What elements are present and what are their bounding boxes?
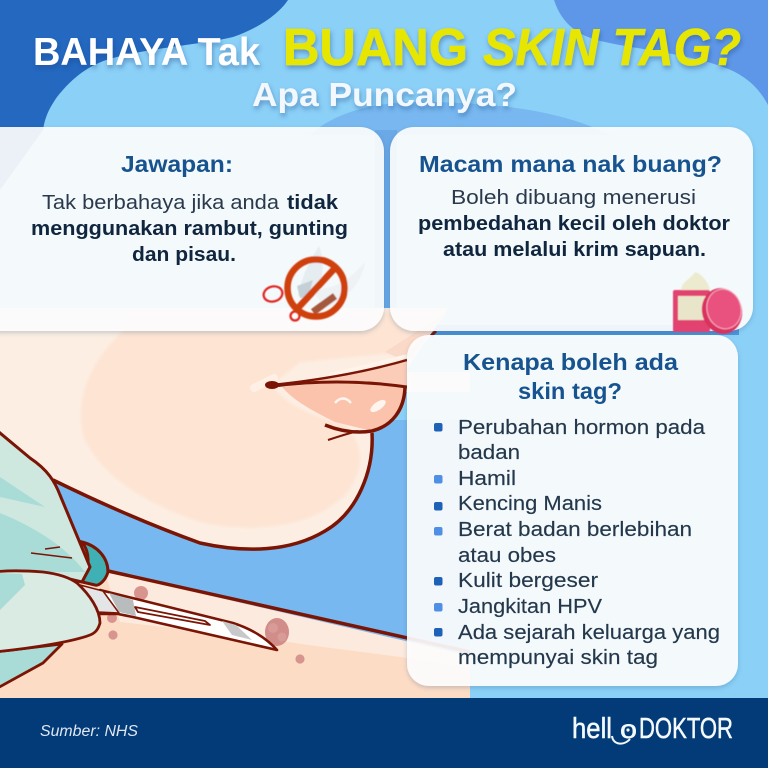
removal text: atau melalui krim sapuan. [443, 238, 706, 261]
cause list: badan [458, 441, 520, 464]
removal text: Boleh dibuang menerusi [451, 186, 696, 209]
logo: hello doktor: hell [572, 713, 612, 745]
icon: no scissors or razor [262, 246, 365, 320]
heading: macam mana nak buang: Macam mana nak buang? [419, 151, 722, 177]
panel: macam mana nak buang [390, 127, 753, 338]
cause list: mempunyai skin tag [458, 646, 658, 669]
cause list: Ada sejarah keluarga yang [458, 621, 720, 644]
blue gap under chin [40, 420, 470, 660]
bullet markers [434, 423, 442, 636]
panel: kenapa boleh ada skin tag [407, 335, 738, 686]
gloved hand [0, 428, 100, 690]
removal text: pembedahan kecil oleh doktor [418, 212, 730, 235]
cause list: Hamil [458, 467, 516, 490]
answer text: Tak berbahaya jika anda [42, 191, 280, 214]
scalpel [80, 585, 277, 650]
heading: kenapa boleh ada skin tag [463, 349, 679, 404]
title [33, 19, 741, 113]
neck highlight [105, 572, 470, 668]
removal text [418, 186, 730, 261]
logo: hello doktor [572, 713, 733, 745]
logo: hello doktor: o [620, 714, 637, 744]
cause list: Berat badan berlebihan [458, 518, 692, 541]
heading: kenapa boleh ada skin tag: Kenapa boleh ada [463, 349, 679, 375]
logo: hello doktor: DOKTOR [639, 713, 733, 745]
title highlight: BUANG: BUANG [283, 19, 468, 77]
cause list: Kulit bergeser [458, 569, 598, 592]
panel: jawapan [0, 127, 384, 331]
cause list [458, 416, 720, 669]
cause list: Perubahan hormon pada [458, 416, 706, 439]
answer text [31, 191, 348, 266]
answer text: tidak [287, 191, 339, 214]
heading: jawapan: Jawapan: [121, 151, 233, 177]
answer text: dan pisau. [132, 243, 236, 266]
subtitle: Apa Puncanya? [252, 76, 517, 113]
lips [254, 312, 447, 440]
teal cuff [82, 542, 108, 585]
title highlight: SKIN TAG?: SKIN TAG? [483, 19, 741, 77]
footer [0, 698, 768, 768]
neck outline [108, 571, 470, 652]
cause list: Jangkitan HPV [458, 595, 602, 618]
skin tags [107, 586, 305, 664]
heading: kenapa boleh ada skin tag: skin tag? [518, 378, 622, 404]
source: Sumber: NHS [40, 723, 139, 740]
icon: cream jar [673, 272, 747, 338]
face skin [0, 308, 470, 549]
illustration: face, neck and scalpel [0, 308, 470, 698]
answer text: menggunakan rambut, gunting [31, 217, 348, 240]
neck skin [0, 570, 470, 698]
cause list: atau obes [458, 544, 556, 567]
cheek shading [81, 312, 445, 528]
cause list: Kencing Manis [458, 492, 602, 515]
title line: BAHAYA Tak: BAHAYA Tak [33, 31, 260, 74]
chin outline [53, 433, 372, 549]
